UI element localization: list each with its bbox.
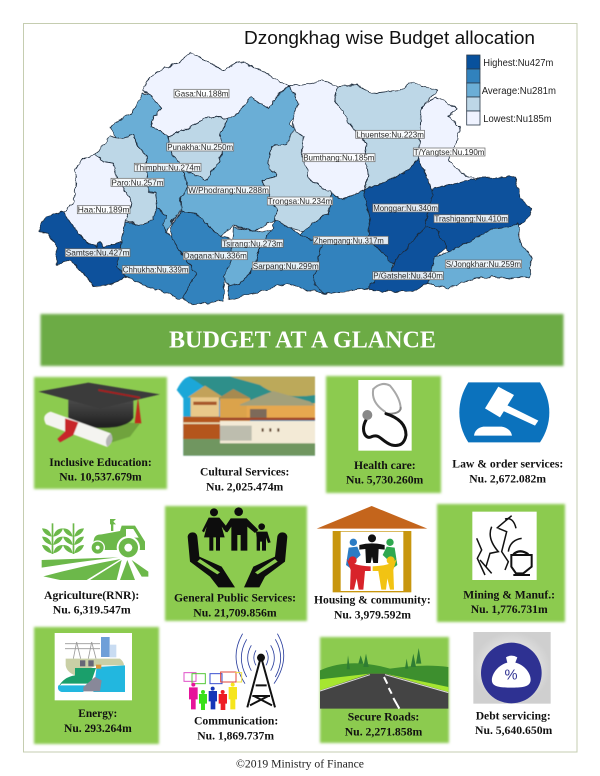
panel: energy: Nu. 293.264m bbox=[64, 721, 132, 735]
panel: mining and manufacturing bbox=[437, 504, 565, 622]
icon: family in hands bbox=[188, 507, 287, 587]
map labels: Dagana:Nu.336m bbox=[184, 251, 247, 261]
panel: cultural services bbox=[177, 377, 315, 493]
panel: inclusive education: Nu. 10,537.679m bbox=[59, 470, 142, 484]
map labels: Thimphu:Nu.274m bbox=[135, 162, 201, 172]
panel: general public services: General Public Services: bbox=[174, 591, 296, 605]
panel: housing and community: Housing & community: bbox=[314, 593, 431, 607]
map labels: Paro:Nu.257m bbox=[112, 177, 164, 187]
map labels: Punakha:Nu.250m bbox=[167, 142, 233, 152]
map labels: Monggar:Nu.340m bbox=[373, 203, 438, 213]
panel: law and order: Nu. 2,672.082m bbox=[469, 471, 546, 485]
icon: money bag: % bbox=[504, 667, 518, 683]
panel: law and order: Law & order services: bbox=[452, 457, 563, 471]
map labels: Samtse:Nu.427m bbox=[66, 248, 130, 258]
panel: mining and manufacturing: Nu. 1,776.731m bbox=[471, 602, 548, 616]
panel: secure roads bbox=[320, 637, 449, 743]
panel: energy bbox=[34, 627, 159, 744]
icon: road bbox=[320, 648, 448, 709]
panel: health care: Nu. 5,730.260m bbox=[346, 472, 423, 486]
banner bbox=[40, 314, 564, 366]
icon: hydropower bbox=[55, 633, 132, 700]
icon: stethoscope bbox=[358, 380, 412, 451]
panel: agriculture: Nu. 6,319.547m bbox=[53, 602, 131, 616]
panel: communication: Communication: bbox=[194, 714, 278, 728]
panel: law and order bbox=[452, 382, 563, 485]
map labels: Lhuentse:Nu.223m bbox=[356, 129, 424, 139]
panel: secure roads: Nu. 2,271.858m bbox=[345, 724, 422, 738]
map labels: Haa:Nu.189m bbox=[78, 205, 130, 215]
footer: ©2019 Ministry of Finance bbox=[236, 759, 364, 771]
panel: communication: Nu. 1,869.737m bbox=[197, 728, 274, 742]
panel: debt servicing: Debt servicing: bbox=[476, 708, 551, 722]
icon: dzong bbox=[177, 377, 315, 456]
panel: agriculture bbox=[42, 519, 148, 616]
legend: Average:Nu281m bbox=[482, 86, 556, 97]
panel: inclusive education: Inclusive Education: bbox=[49, 455, 152, 469]
panel: inclusive education bbox=[34, 377, 167, 489]
map labels: T/Yangtse:Nu.190m bbox=[414, 147, 485, 157]
panel: debt servicing bbox=[473, 632, 552, 737]
icon: tower and people bbox=[184, 634, 284, 710]
legend: Highest:Nu427m bbox=[483, 58, 553, 69]
icon: gavel bbox=[459, 382, 549, 442]
panel: cultural services: Cultural Services: bbox=[200, 465, 289, 479]
panel: housing and community bbox=[314, 506, 431, 621]
map labels: Sarpang:Nu.299m bbox=[253, 261, 319, 271]
map labels: Bumthang:Nu.185m bbox=[303, 153, 375, 163]
map labels: Tsirang:Nu.273m bbox=[222, 238, 283, 248]
panel: mining and manufacturing: Mining & Manuf.: bbox=[463, 588, 555, 602]
icon: miner bbox=[472, 512, 537, 580]
icon: house with people bbox=[317, 506, 427, 592]
banner: BUDGET AT A GLANCE bbox=[169, 328, 436, 354]
panel: housing and community: Nu. 3,979.592m bbox=[334, 607, 411, 621]
map of dzongkhags bbox=[38, 53, 532, 305]
panel: cultural services: Nu. 2,025.474m bbox=[206, 479, 283, 493]
panel: energy: Energy: bbox=[78, 706, 117, 720]
map labels: W/Phodrang:Nu.288m bbox=[188, 185, 269, 195]
map labels: S/Jongkhar:Nu.259m bbox=[446, 259, 521, 269]
map labels bbox=[65, 89, 522, 281]
legend: Lowest:Nu185m bbox=[483, 114, 552, 125]
panel: communication bbox=[184, 634, 284, 742]
legend bbox=[467, 55, 556, 125]
title: Dzongkhag wise Budget allocation bbox=[244, 27, 535, 48]
icon: farm tractor bbox=[42, 519, 148, 580]
map labels: Trashigang:Nu.410m bbox=[434, 214, 508, 224]
map labels: P/Gatshel:Nu.340m bbox=[373, 271, 443, 281]
panel: agriculture: Agriculture(RNR): bbox=[44, 588, 139, 602]
panel: general public services: Nu. 21,709.856m bbox=[193, 606, 277, 620]
map labels: Gasa:Nu.188m bbox=[174, 89, 229, 99]
map labels: Trongsa:Nu.234m bbox=[268, 196, 332, 206]
icon: graduation cap bbox=[38, 383, 160, 447]
panel: debt servicing: Nu. 5,640.650m bbox=[475, 723, 552, 737]
panel: secure roads: Secure Roads: bbox=[348, 710, 419, 724]
panel: general public services bbox=[165, 506, 307, 621]
panel: health care: Health care: bbox=[354, 458, 416, 472]
map labels: Chhukha:Nu.339m bbox=[123, 265, 189, 275]
panel: health care bbox=[326, 376, 441, 493]
map labels: Zhemgang:Nu.317m bbox=[314, 235, 384, 245]
